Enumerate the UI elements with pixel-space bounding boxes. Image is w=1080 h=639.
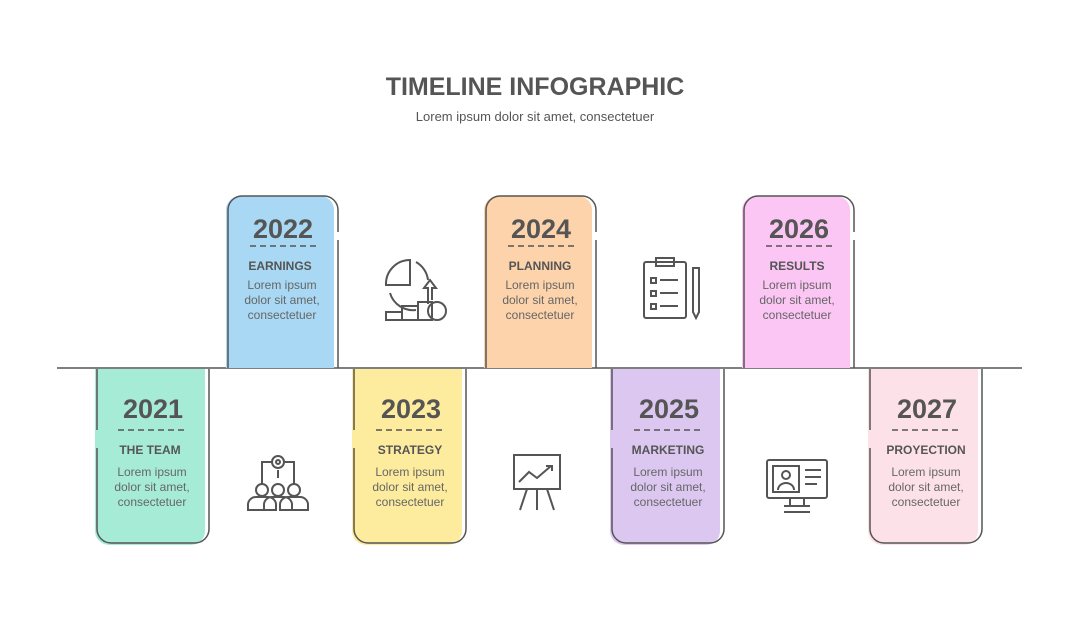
icon: clipboard checklist bbox=[644, 258, 699, 318]
card: 2027 proyection: PROYECTION bbox=[886, 443, 966, 457]
card: 2025 marketing: dolor sit amet, bbox=[630, 480, 706, 494]
card: 2022 earnings: Lorem ipsum bbox=[247, 278, 317, 292]
card: 2027 proyection bbox=[868, 369, 982, 545]
icon: earnings pie and coins bbox=[386, 260, 446, 320]
card: 2021 the team: THE TEAM bbox=[119, 443, 181, 457]
card: 2023 strategy: dolor sit amet, bbox=[372, 480, 448, 494]
card: 2023 strategy: STRATEGY bbox=[378, 443, 442, 457]
icon: presentation board bbox=[514, 455, 560, 510]
card: 2021 the team: dolor sit amet, bbox=[114, 480, 190, 494]
card: 2026 results: consectetuer bbox=[763, 308, 831, 322]
card: 2021 the team bbox=[95, 369, 209, 545]
card: 2023 strategy: 2023 bbox=[381, 394, 441, 424]
card: 2026 results bbox=[742, 196, 854, 368]
card: 2022 earnings: dolor sit amet, bbox=[244, 293, 320, 307]
card: 2027 proyection: consectetuer bbox=[892, 495, 960, 509]
card: 2024 planning: 2024 bbox=[511, 214, 571, 244]
card: 2025 marketing: consectetuer bbox=[634, 495, 702, 509]
card: 2022 earnings bbox=[226, 196, 338, 368]
card: 2023 strategy bbox=[352, 369, 466, 545]
card: 2025 marketing: 2025 bbox=[639, 394, 699, 424]
card: 2024 planning: Lorem ipsum bbox=[505, 278, 575, 292]
card: 2025 marketing: MARKETING bbox=[632, 443, 704, 457]
card: 2026 results: RESULTS bbox=[769, 259, 825, 273]
subtitle: Lorem ipsum dolor sit amet, consectetuer bbox=[416, 109, 655, 124]
card: 2024 planning: PLANNING bbox=[509, 259, 571, 273]
card: 2024 planning: consectetuer bbox=[506, 308, 574, 322]
card: 2022 earnings: consectetuer bbox=[248, 308, 316, 322]
icon: team with gear bbox=[248, 456, 308, 510]
title: TIMELINE INFOGRAPHIC bbox=[386, 73, 684, 101]
card: 2024 planning: dolor sit amet, bbox=[502, 293, 578, 307]
card: 2026 results: Lorem ipsum bbox=[762, 278, 832, 292]
card: 2021 the team: consectetuer bbox=[118, 495, 186, 509]
card: 2027 proyection: dolor sit amet, bbox=[888, 480, 964, 494]
timeline axis bbox=[57, 367, 1022, 369]
card: 2027 proyection: 2027 bbox=[897, 394, 957, 424]
card: 2026 results: dolor sit amet, bbox=[759, 293, 835, 307]
card: 2025 marketing: Lorem ipsum bbox=[633, 465, 703, 479]
card: 2027 proyection: Lorem ipsum bbox=[891, 465, 961, 479]
card: 2026 results: 2026 bbox=[769, 214, 829, 244]
card: 2021 the team: Lorem ipsum bbox=[117, 465, 187, 479]
card: 2021 the team: 2021 bbox=[123, 394, 183, 424]
card: 2024 planning bbox=[484, 196, 596, 368]
card: 2022 earnings: 2022 bbox=[253, 214, 313, 244]
card: 2023 strategy: consectetuer bbox=[376, 495, 444, 509]
icon: computer monitor profile bbox=[767, 460, 827, 512]
card: 2025 marketing bbox=[610, 369, 724, 545]
card: 2023 strategy: Lorem ipsum bbox=[375, 465, 445, 479]
card: 2022 earnings: EARNINGS bbox=[248, 259, 312, 273]
